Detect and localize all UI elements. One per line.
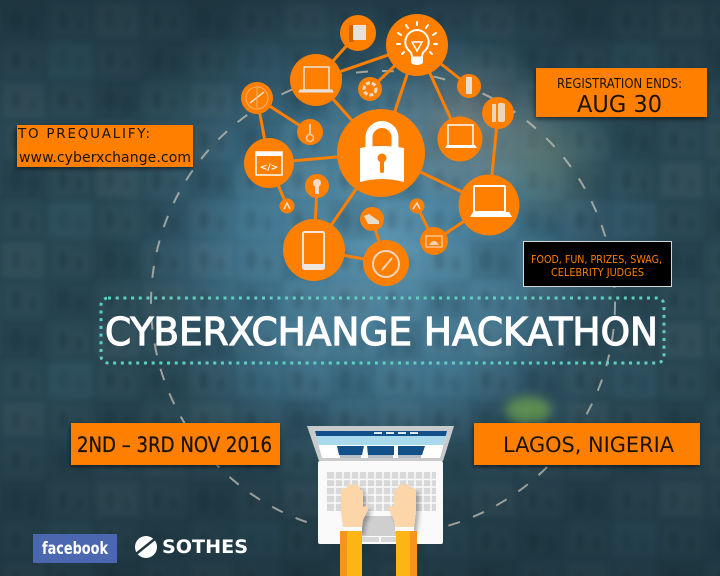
connector lines — [257, 33, 498, 263]
callout: registration deadline: AUG 30 — [577, 92, 662, 118]
left sleeve — [340, 531, 362, 576]
left hand — [341, 484, 368, 531]
node: code window — [244, 138, 294, 188]
node: tiny tool — [280, 198, 294, 214]
right hand — [389, 484, 416, 531]
node: laptop top left — [290, 54, 342, 106]
callout: perks: FOOD, FUN, PRIZES, SWAG, — [531, 254, 662, 266]
callout: prequalify: TO PREQUALIFY: — [17, 126, 150, 142]
callout: location — [474, 423, 700, 465]
laptop base — [318, 461, 443, 544]
callout: registration deadline — [536, 68, 707, 118]
logo: facebook — [33, 534, 117, 563]
dashed ring — [151, 71, 615, 535]
node: bulb small — [305, 174, 329, 198]
logo: facebook: facebook — [42, 539, 109, 559]
network diagram — [241, 14, 520, 286]
callout: prequalify — [17, 125, 193, 167]
node: radiation — [358, 77, 382, 101]
node: small device — [457, 74, 481, 98]
right sleeve — [396, 531, 417, 576]
node: laptop right — [438, 116, 482, 162]
node: tablet — [283, 219, 345, 281]
node: bottle — [482, 97, 514, 129]
node: cloud monitor — [420, 227, 448, 255]
callout: dates — [71, 423, 280, 465]
laptop screen — [307, 426, 454, 461]
callout: perks — [524, 242, 672, 286]
callout: prequalify: www.cyberxchange.com — [19, 150, 191, 166]
dotted title frame — [101, 298, 664, 363]
callout: dates: 2ND – 3RD NOV 2016 — [77, 433, 272, 457]
node: gauge — [363, 240, 409, 286]
node: laptop large — [458, 174, 520, 236]
title: CYBERXCHANGE HACKATHON — [105, 310, 658, 354]
node: padlock — [337, 109, 425, 197]
node: code window: </> — [260, 163, 278, 173]
node: compass — [241, 82, 273, 114]
illustration: laptop with hands — [307, 426, 454, 576]
node: light bulb — [386, 14, 448, 76]
node: shoe — [360, 207, 384, 231]
node: small tag — [410, 198, 424, 214]
node: chip — [340, 15, 376, 51]
logo: sothes: SOTHES — [162, 536, 248, 558]
node: key — [297, 119, 323, 145]
callout: registration deadline: REGISTRATION ENDS: — [557, 76, 682, 92]
callout: location: LAGOS, NIGERIA — [503, 433, 675, 457]
callout: perks: CELEBRITY JUDGES — [551, 267, 644, 279]
